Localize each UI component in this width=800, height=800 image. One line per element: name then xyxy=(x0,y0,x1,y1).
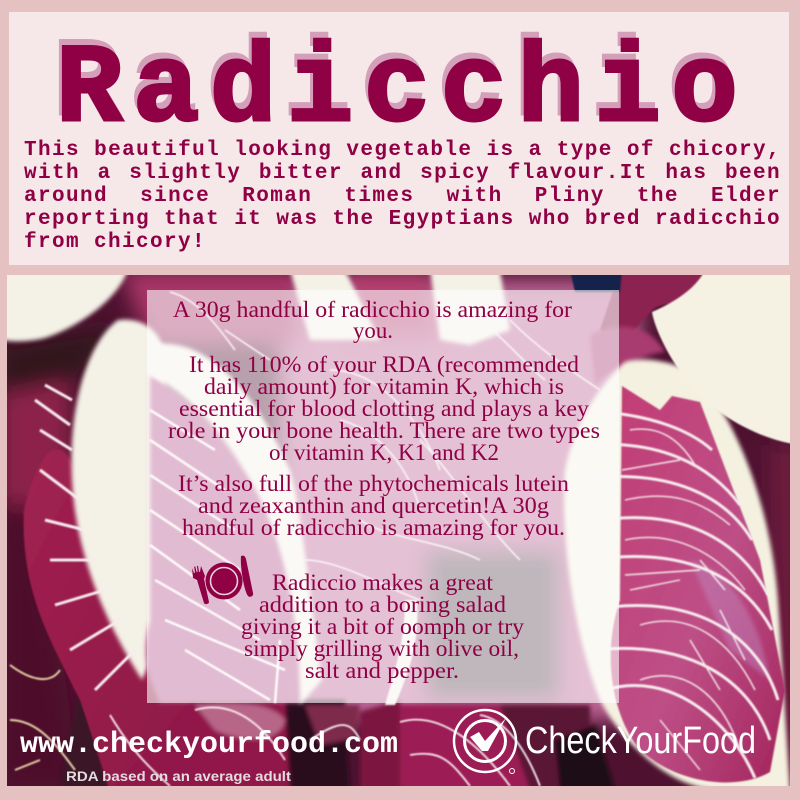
text block: vitamin K: It has 110% of your RDA (recommended xyxy=(189,352,580,377)
right upper leaves xyxy=(600,275,703,331)
title shadow: Radicchio xyxy=(53,23,745,148)
text block: intro to benefits: A 30g handful of radicchio is amazing for xyxy=(173,297,572,322)
title: Radicchio xyxy=(56,29,748,154)
photo: radicchio leaves xyxy=(0,270,800,790)
right big leaf with rib xyxy=(564,360,790,790)
website url: www.checkyourfood.com xyxy=(20,728,398,762)
text block: phytochemicals: and zeaxanthin and quercetin!A 30g xyxy=(198,493,550,518)
bottom band leaves xyxy=(60,696,616,786)
text block: serving suggestion: addition to a boring salad xyxy=(259,592,507,617)
left leaf xyxy=(22,449,128,786)
text block: vitamin K: of vitamin K, K1 and K2 xyxy=(269,440,499,465)
logo: CheckYourFood xyxy=(454,710,756,774)
text block: vitamin K: daily amount) for vitamin K, which is xyxy=(204,374,564,399)
icon: plate, fork and knife xyxy=(192,556,253,604)
intro text block: This beautiful looking vegetable is a type of chicory, with a slightly bitter and spicy flavour.It has been around since Roman times with Pliny the Elder reporting that it was the Egyptians who bred radicchio from chicory! xyxy=(24,139,781,254)
centre pink feathered leaf xyxy=(146,375,302,703)
text block: vitamin K xyxy=(168,352,600,465)
text block: serving suggestion: salt and pepper. xyxy=(305,658,459,683)
text block: phytochemicals: handful of radicchio is amazing for you. xyxy=(182,515,565,540)
centre white midrib xyxy=(150,344,322,705)
text block: serving suggestion xyxy=(241,570,525,683)
text block: vitamin K: role in your bone health. There are two types xyxy=(168,418,600,443)
text block: phytochemicals: It’s also full of the phytochemicals lutein xyxy=(178,471,570,496)
text block: serving suggestion: simply grilling with olive oil, xyxy=(244,636,519,661)
panel: header xyxy=(9,12,789,265)
main graphic: photo, text panel, footer xyxy=(7,275,790,786)
text block: intro to benefits xyxy=(173,297,572,343)
panel: translucent text background xyxy=(147,290,619,703)
text block: serving suggestion: giving it a bit of oomph or try xyxy=(241,614,525,639)
logo: CheckYourFood: CheckYourFood xyxy=(525,720,756,762)
text block: vitamin K: essential for blood clotting and plays a key xyxy=(179,396,590,421)
text block: intro to benefits: you. xyxy=(353,318,393,343)
text block: phytochemicals xyxy=(178,471,570,540)
leaf veins xyxy=(10,292,778,786)
footnote: RDA based on an average adult xyxy=(66,768,291,784)
text block: serving suggestion: Radiccio makes a great xyxy=(272,570,494,595)
whites xyxy=(0,270,510,680)
